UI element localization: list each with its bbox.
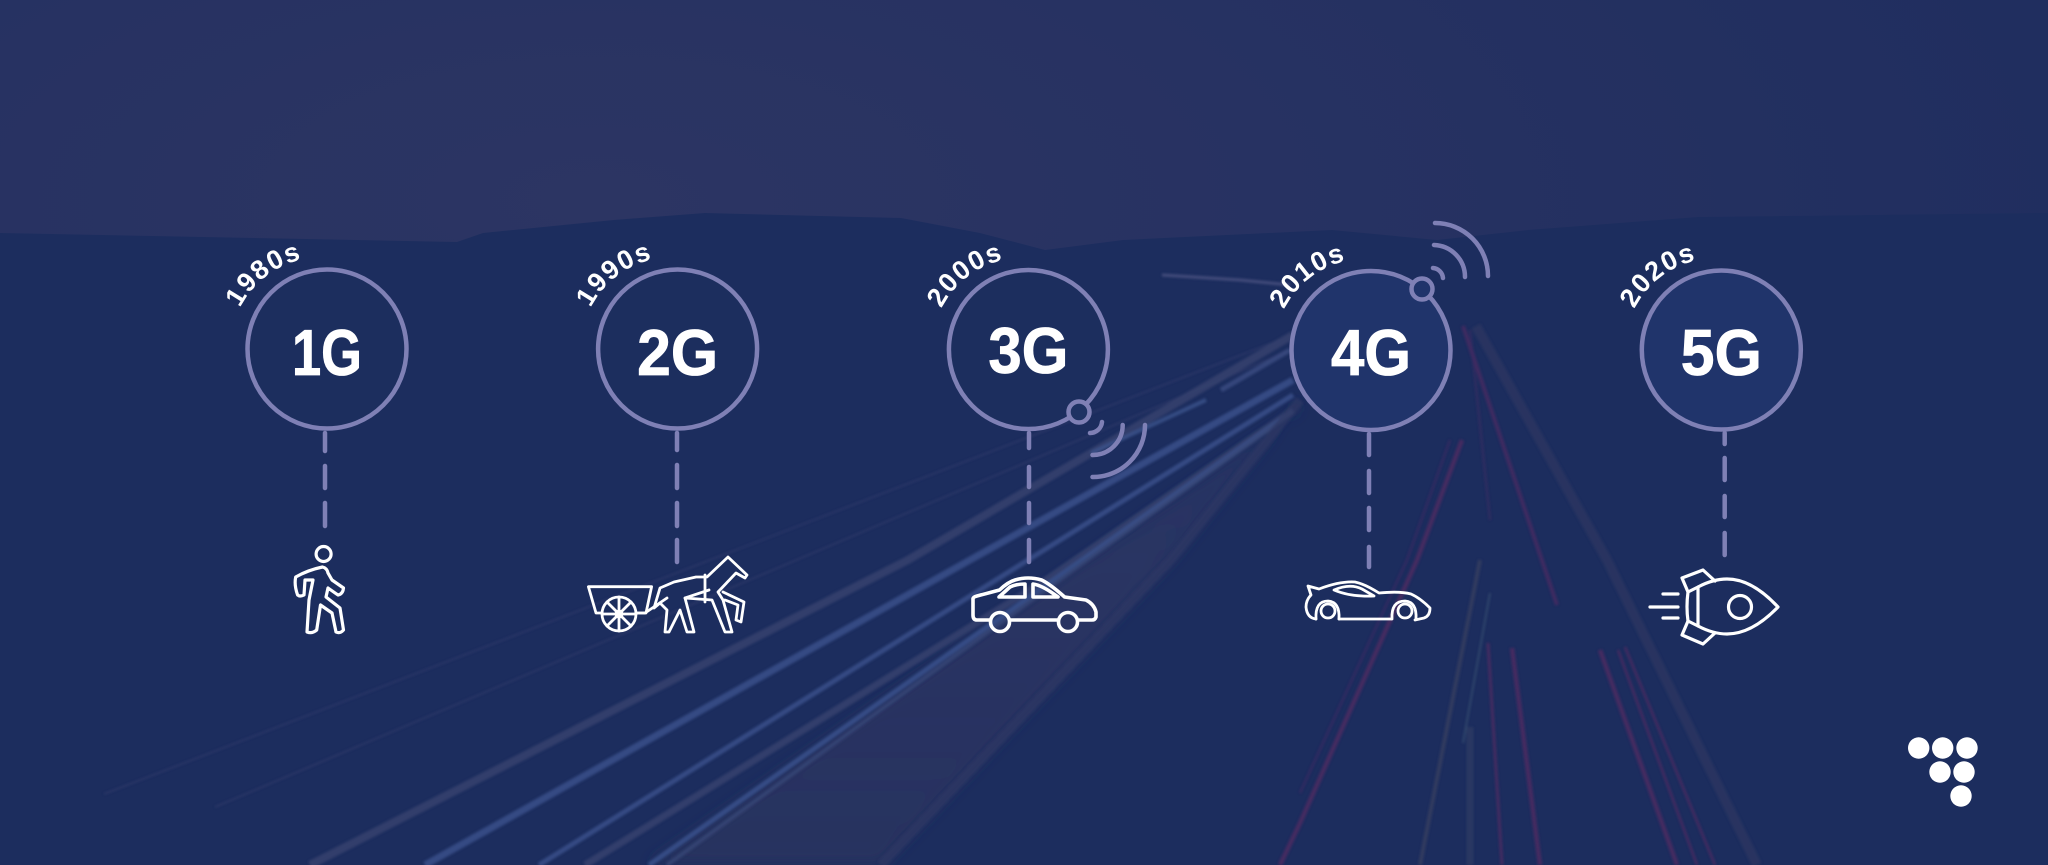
background: dusk sky xyxy=(0,0,2048,250)
1980s decade label: 1980s xyxy=(227,247,339,306)
timeline item: 3G xyxy=(928,248,1148,634)
2010s decade label: 2010s xyxy=(1270,248,1344,309)
2000s decade label: 2000s xyxy=(928,248,1001,308)
icon: rocket xyxy=(1650,570,1778,644)
3G label: 3G xyxy=(988,314,1068,387)
3G dashed connector xyxy=(1027,433,1031,562)
5G dashed connector xyxy=(1722,433,1727,555)
4G label: 4G xyxy=(1331,316,1411,389)
3G signal node xyxy=(1068,402,1090,422)
3G circle xyxy=(949,270,1108,429)
icon: sports car xyxy=(1306,582,1430,620)
background: white and blue light trails xyxy=(104,275,1300,865)
1G dashed connector xyxy=(323,433,327,526)
2G label: 2G xyxy=(637,316,718,389)
background: lit road surface xyxy=(649,400,1300,865)
icon: horse and cart xyxy=(588,557,747,632)
timeline item: 1G xyxy=(227,247,409,634)
5G label: 5G xyxy=(1681,316,1762,389)
timeline item: 2G xyxy=(578,247,760,634)
1G label: 1G xyxy=(292,316,362,389)
4G signal node xyxy=(1412,278,1432,300)
1G circle xyxy=(248,270,406,428)
background: red tail-light trails xyxy=(1280,326,1757,865)
2G dashed connector xyxy=(675,433,679,562)
5G circle xyxy=(1642,270,1801,430)
2G circle xyxy=(598,270,757,428)
timeline item: 5G xyxy=(1620,248,1803,646)
4G signal waves xyxy=(1433,223,1488,278)
3G signal waves xyxy=(1090,422,1145,477)
4G dashed connector xyxy=(1367,434,1371,567)
4G circle xyxy=(1292,271,1450,430)
icon: walking person xyxy=(295,546,344,633)
logo: six white dots xyxy=(1908,737,1978,807)
2020s decade label: 2020s xyxy=(1620,248,1694,308)
icon: sedan car xyxy=(973,578,1096,632)
timeline item: 4G xyxy=(1270,220,1490,622)
1990s decade label: 1990s xyxy=(578,247,650,306)
